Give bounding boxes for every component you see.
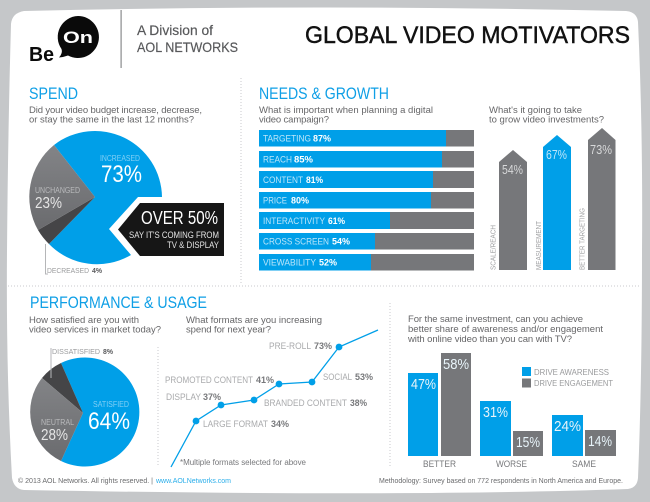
pie chart: satisfaction: 8% (103, 347, 113, 356)
legend: DRIVE AWARENESS (534, 367, 609, 377)
bar chart: better worse same: BETTER (423, 459, 456, 470)
question: formats: spend for next year? (186, 324, 271, 336)
line chart: formats: BRANDED CONTENT (264, 398, 347, 409)
callout: over 50% (118, 203, 224, 256)
panel: spend (29, 85, 224, 275)
division text (137, 22, 238, 55)
pie chart: satisfaction: DISSATISFIED (52, 347, 101, 356)
bar chart: campaign priorities: 80% (291, 196, 309, 206)
pie chart: budget change: UNCHANGED (35, 186, 80, 195)
footer: copyright (18, 476, 231, 485)
line chart: formats: 34% (271, 419, 290, 430)
question: satisfaction: How satisfied are you with (29, 315, 139, 326)
panel: needs and growth (259, 85, 616, 270)
arrow: scale/reach: SCALE/REACH (490, 225, 498, 270)
question: growing investments (489, 105, 604, 126)
line chart: formats: 73% (314, 341, 333, 352)
bar chart: campaign priorities (259, 130, 474, 270)
bar chart: campaign priorities: 52% (319, 258, 337, 268)
panel: performance and usage (29, 294, 378, 467)
bar chart: campaign priorities: 85% (294, 154, 313, 164)
bar chart: campaign priorities: CONTENT (263, 175, 303, 185)
bar chart: better worse same: 47% (411, 376, 436, 393)
legend (522, 367, 613, 388)
question: spend: Did your video budget increase, decrease, (29, 105, 202, 116)
question: satisfaction (29, 315, 161, 336)
bar chart: campaign priorities: REACH (263, 154, 292, 164)
callout: over 50%: OVER 50% (141, 208, 218, 228)
pie chart: satisfaction: 64% (88, 408, 130, 435)
line chart: formats: PROMOTED CONTENT (165, 375, 253, 386)
bar chart: campaign priorities: VIEWABILITY (263, 258, 316, 268)
question: growing investments: What's it going to take (489, 105, 582, 116)
arrow: better targeting: BETTER TARGETING (580, 208, 586, 270)
line chart: formats: SOCIAL (323, 372, 352, 383)
question: growing investments: to grow video investments? (489, 114, 604, 126)
panel: online video vs tv (407, 314, 616, 470)
bar chart: better worse same: 14% (588, 433, 612, 450)
bar chart: better worse same: WORSE (496, 459, 527, 470)
arrow: scale/reach (490, 150, 527, 270)
pie chart: budget change: 23% (35, 195, 62, 212)
footer: copyright: © 2013 AOL Networks. All rights reserved. | (18, 476, 153, 485)
line chart: formats: PRE-ROLL (269, 341, 311, 352)
bar chart: better worse same: 58% (443, 356, 469, 373)
question: online vs tv: better share of awareness and/or engagement (408, 324, 603, 335)
question: campaign planning: video campaign? (259, 114, 329, 126)
question: spend (29, 105, 202, 126)
heading: spend: SPEND (29, 85, 78, 103)
bar chart: campaign priorities: 54% (332, 236, 350, 246)
title: GLOBAL VIDEO MOTIVATORS (305, 22, 630, 49)
heading: needs and growth: NEEDS & GROWTH (259, 85, 389, 103)
logo: Be On (29, 16, 99, 66)
logo: Be On: Be (29, 44, 54, 66)
arrow: better targeting: 73% (590, 142, 612, 157)
bar chart: campaign priorities: CROSS SCREEN (263, 236, 329, 246)
question: campaign planning: What is important when planning a digital (259, 105, 433, 116)
line chart: formats (165, 330, 378, 467)
line chart: formats: LARGE FORMAT (203, 419, 268, 430)
pie chart: budget change: DECREASED (47, 266, 90, 275)
bar chart: campaign priorities: TARGETING (263, 134, 311, 144)
arrow: better targeting (580, 128, 616, 270)
question: satisfaction: video services in market today? (29, 324, 161, 336)
pie chart: satisfaction: NEUTRAL (41, 418, 74, 427)
callout: over 50%: SAY IT'S COMING FROM (129, 230, 219, 240)
bar chart: better worse same (408, 353, 616, 470)
bar chart: better worse same: 15% (516, 434, 540, 451)
question: spend: or stay the same in the last 12 months? (29, 114, 194, 126)
bar chart: campaign priorities: 87% (313, 134, 331, 144)
bar chart: campaign priorities: PRICE (263, 196, 287, 206)
bar chart: better worse same: SAME (572, 459, 596, 470)
line chart: formats: 37% (203, 392, 222, 403)
arrow: measurement: MEASUREMENT (536, 220, 543, 270)
arrow: measurement (536, 135, 571, 270)
logo: Be On: On (63, 28, 93, 47)
question: formats: What formats are you increasing (186, 315, 322, 326)
arrow: scale/reach: 54% (502, 162, 523, 177)
pie chart: satisfaction (30, 347, 139, 466)
bar chart: campaign priorities: 81% (306, 175, 323, 185)
pie chart: budget change: INCREASED (100, 154, 140, 163)
heading: performance and usage: PERFORMANCE & USAGE (30, 294, 207, 312)
pie chart: satisfaction: SATISFIED (93, 400, 129, 409)
bar chart: campaign priorities: INTERACTIVITY (263, 216, 325, 226)
question: campaign planning (259, 105, 433, 126)
arrow: measurement: 67% (546, 147, 567, 162)
pie chart: budget change: 73% (101, 161, 142, 188)
question: formats (186, 315, 322, 336)
question: online vs tv (407, 314, 603, 345)
callout: over 50%: TV & DISPLAY (167, 240, 219, 250)
pie chart: budget change: 4% (92, 266, 102, 275)
footer: copyright: www.AOLNetworks.com (155, 476, 231, 485)
line chart: formats: *Multiple formats selected for above (180, 458, 307, 467)
line chart: formats: DISPLAY (166, 392, 202, 403)
pie chart: satisfaction: 28% (41, 427, 68, 444)
division text: AOL NETWORKS (137, 39, 238, 55)
question: online vs tv: with online video than you can with TV? (407, 334, 572, 345)
footer: methodology: Methodology: Survey based on 772 respondents in North America and Europe. (379, 476, 623, 485)
pie chart: budget change (29, 131, 162, 275)
bar chart: better worse same: 31% (483, 404, 508, 421)
line chart: formats: 38% (350, 398, 367, 409)
line chart: formats: 53% (355, 372, 374, 383)
division text: A Division of (137, 22, 213, 38)
bar chart: campaign priorities: 61% (328, 216, 345, 226)
bar chart: better worse same: 24% (554, 418, 581, 435)
legend: DRIVE ENGAGEMENT (534, 378, 613, 388)
question: online vs tv: For the same investment, can you achieve (408, 314, 583, 325)
line chart: formats: 41% (256, 375, 275, 386)
